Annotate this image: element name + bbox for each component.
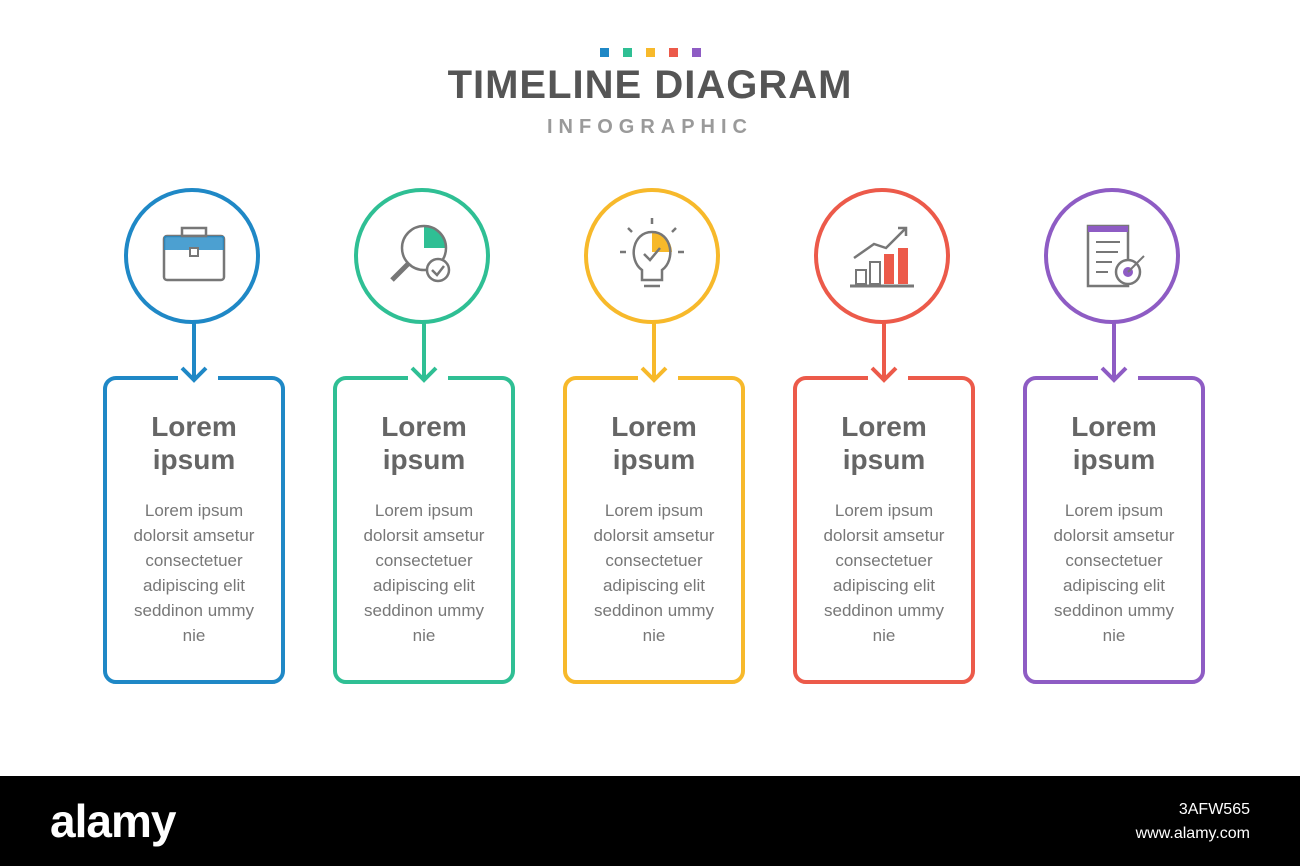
panel: step 5: nie (1103, 626, 1125, 645)
panel: step 1: nie (183, 626, 205, 645)
icon: bar chart (814, 188, 950, 324)
logo: alamy (50, 795, 175, 847)
panel: step 4: consectetuer (835, 551, 933, 570)
image id: 3AFW565 (1179, 801, 1250, 818)
icon: briefcase (124, 188, 260, 324)
panel: step 2: seddinon ummy (364, 601, 484, 620)
panel: step 3: seddinon ummy (594, 601, 714, 620)
panel: step 1: consectetuer (145, 551, 243, 570)
image id (1136, 801, 1250, 842)
panel: step 5: dolorsit amsetur (1054, 526, 1174, 545)
panel: step 2: consectetuer (375, 551, 473, 570)
panel: step 3: ipsum (613, 444, 695, 475)
panel: step 5: adipiscing elit (1063, 576, 1165, 595)
panel: step 4: ipsum (843, 444, 925, 475)
panel: step 3 (563, 188, 745, 684)
panel: step 5: Lorem (1071, 411, 1157, 442)
panel: step 3: Lorem ipsum (605, 501, 703, 520)
panel: step 1 (103, 188, 285, 684)
arrow (870, 324, 898, 383)
icon: magnifier (354, 188, 490, 324)
subtitle: INFOGRAPHIC (547, 116, 753, 138)
panel: step 1: seddinon ummy (134, 601, 254, 620)
panel: step 3: adipiscing elit (603, 576, 705, 595)
panel: step 2: nie (413, 626, 435, 645)
icon: checklist target (1044, 188, 1180, 324)
panel: step 2: adipiscing elit (373, 576, 475, 595)
panel: step 1: Lorem (151, 411, 237, 442)
panel: step 1: Lorem ipsum (145, 501, 243, 520)
panel: step 5: consectetuer (1065, 551, 1163, 570)
panel: step 5 (1023, 188, 1205, 684)
panel: step 2: Lorem ipsum (375, 501, 473, 520)
panel: step 4: seddinon ummy (824, 601, 944, 620)
icon: lightbulb (584, 188, 720, 324)
panel: step 4: dolorsit amsetur (824, 526, 944, 545)
panel: step 3: dolorsit amsetur (594, 526, 714, 545)
panel: step 1: adipiscing elit (143, 576, 245, 595)
panel: step 4: adipiscing elit (833, 576, 935, 595)
color dots (600, 48, 701, 57)
panel: step 5: ipsum (1073, 444, 1155, 475)
image id: www.alamy.com (1136, 825, 1250, 842)
arrow (640, 324, 668, 383)
panel: step 2: ipsum (383, 444, 465, 475)
footer bar (0, 776, 1300, 866)
panel: step 2: dolorsit amsetur (364, 526, 484, 545)
panel: step 2 (333, 188, 515, 684)
panel: step 1: dolorsit amsetur (134, 526, 254, 545)
panel: step 5: Lorem ipsum (1065, 501, 1163, 520)
arrow (180, 324, 208, 383)
panel: step 4: Lorem ipsum (835, 501, 933, 520)
panel: step 4 (793, 188, 975, 684)
panel: step 4: Lorem (841, 411, 927, 442)
panel: step 3: Lorem (611, 411, 697, 442)
panel: step 3: nie (643, 626, 665, 645)
title: TIMELINE DIAGRAM (448, 63, 852, 107)
panel: step 4: nie (873, 626, 895, 645)
panel: step 3: consectetuer (605, 551, 703, 570)
panel: step 5: seddinon ummy (1054, 601, 1174, 620)
arrow (1100, 324, 1128, 383)
panel: step 1: ipsum (153, 444, 235, 475)
arrow (410, 324, 438, 383)
panel: step 2: Lorem (381, 411, 467, 442)
